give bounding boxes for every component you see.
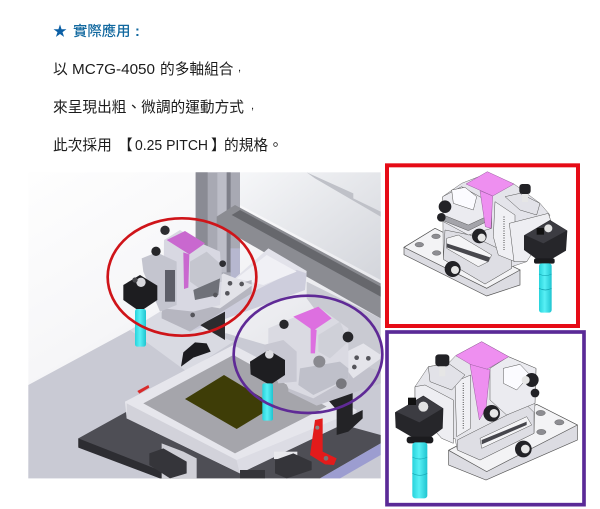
text block: description: 此次採用 <box>53 137 112 154</box>
dark base plate <box>78 412 381 478</box>
text block: description: 以 <box>53 62 68 78</box>
slide rail <box>187 248 307 332</box>
knobs <box>437 184 531 277</box>
knobs <box>435 354 539 457</box>
horizontal beam <box>217 205 381 318</box>
black block right <box>327 383 363 435</box>
white stage <box>125 345 357 473</box>
stage block <box>443 187 512 284</box>
connectors <box>149 443 312 478</box>
text block: description: 0.25 PITCH <box>135 138 208 154</box>
purple circle highlight <box>234 296 382 413</box>
aluminium column <box>196 172 240 319</box>
text block: description: 的多軸組合 <box>160 60 234 78</box>
red circle highlight <box>108 218 256 336</box>
dark bracket <box>181 342 211 367</box>
camera <box>524 220 567 264</box>
text block: description: , <box>251 100 254 112</box>
base plate <box>449 404 577 480</box>
heading: practical application <box>53 22 140 40</box>
cyan lens <box>539 263 552 313</box>
text block: description: 【 <box>118 137 133 154</box>
heading: practical application: : <box>135 24 140 40</box>
camera <box>395 396 443 443</box>
small red marks <box>137 385 149 394</box>
body silhouette <box>443 173 550 284</box>
text block: description: 來呈現出粗、微調的運動方式 <box>53 99 244 116</box>
base plate <box>404 228 520 296</box>
text block: description <box>53 60 283 154</box>
wall panel <box>240 172 381 280</box>
text block: description: MC7G-4050 <box>72 62 155 78</box>
text block: description: 的規格。 <box>224 137 283 154</box>
text block: description: 】 <box>211 137 226 154</box>
text block: description: , <box>238 62 241 74</box>
stage block <box>457 357 536 460</box>
olive glass plate <box>185 375 275 429</box>
panel: machine overview render <box>28 172 383 478</box>
assembly 2 <box>250 307 383 421</box>
table surface <box>28 330 381 478</box>
heading: practical application: 實際應用 <box>73 22 131 40</box>
pink bracket <box>466 172 514 228</box>
heading: practical application: ★ <box>53 23 67 39</box>
panel: purple detail frame <box>387 332 584 505</box>
cyan lens <box>412 442 427 498</box>
panel: red detail frame <box>387 165 578 326</box>
assembly 1 <box>123 226 253 347</box>
red L bracket <box>310 418 337 465</box>
right slide <box>493 193 552 262</box>
left slide <box>415 363 471 443</box>
body silhouette <box>415 342 536 460</box>
pink bracket <box>456 342 509 420</box>
